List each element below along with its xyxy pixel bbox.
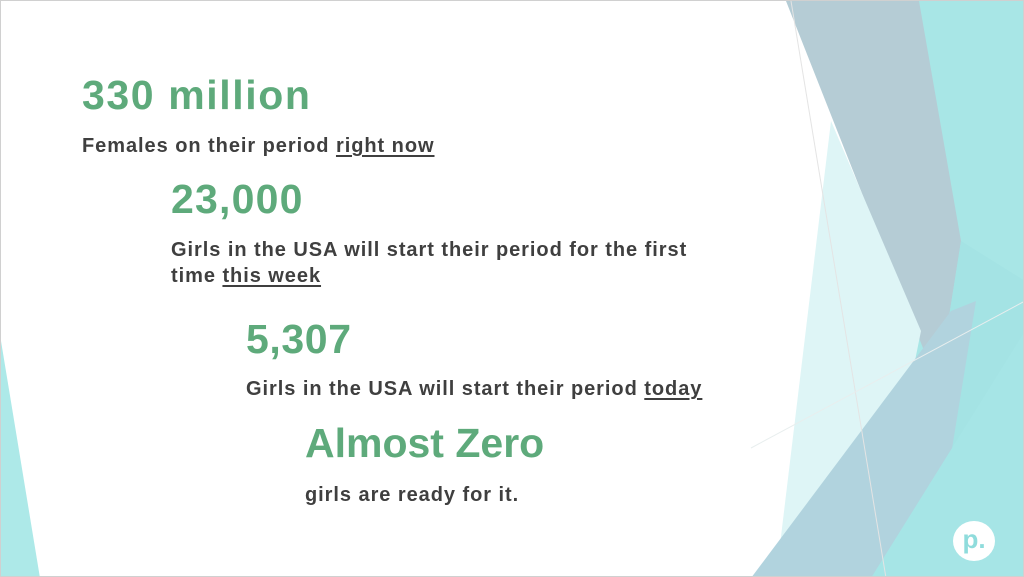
icon: p. logo xyxy=(953,521,995,561)
stat: Almost Zero: Almost Zero xyxy=(305,420,544,466)
icon: p. logo: p. xyxy=(962,524,986,554)
text: girls start this week: time this week xyxy=(171,265,321,287)
text: females on period: Females on their period right now xyxy=(82,135,434,157)
text: girls start today: Girls in the USA will start their period today xyxy=(246,378,702,400)
stat: 23,000: 23,000 xyxy=(171,176,304,222)
text: girls start this week: Girls in the USA will start their period for the first xyxy=(171,239,687,261)
text: girls ready: girls are ready for it. xyxy=(305,484,519,506)
stat: 330 million: 330 million xyxy=(82,72,312,118)
stat: 5,307: 5,307 xyxy=(246,316,352,362)
text: girls start this week xyxy=(171,239,687,287)
